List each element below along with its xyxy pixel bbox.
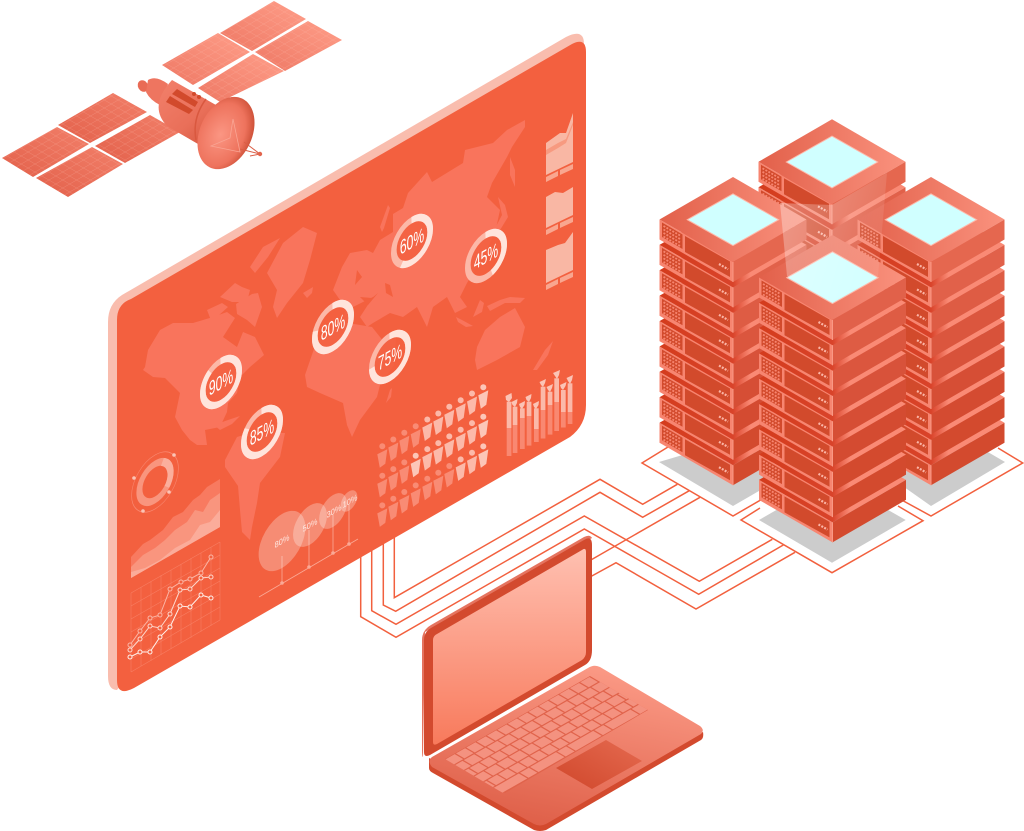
pad left stack xyxy=(642,447,790,516)
stacked area chart xyxy=(131,479,220,578)
series bright xyxy=(128,593,213,659)
mini area charts top right xyxy=(546,113,573,290)
small ring gauge xyxy=(132,442,178,522)
world map xyxy=(143,120,553,540)
novaya zemlya xyxy=(380,205,390,232)
bubble labels: 10% xyxy=(343,492,358,510)
series faded xyxy=(128,555,213,647)
satellite body xyxy=(159,80,230,144)
line chart xyxy=(128,542,220,672)
satellite nozzle xyxy=(136,78,168,105)
shadow left stack xyxy=(659,440,790,506)
floor pads and shadows xyxy=(642,430,1023,573)
dish antenna xyxy=(186,88,266,178)
greenland xyxy=(267,227,317,318)
mini chart 3 xyxy=(546,232,573,290)
ellesmere xyxy=(250,238,280,273)
cable A xyxy=(394,479,677,598)
server stack right xyxy=(858,177,1004,485)
donut 85% xyxy=(244,400,280,464)
pad center stack xyxy=(741,506,923,573)
madagascar xyxy=(386,388,392,403)
bubble chart xyxy=(259,487,358,597)
series middle xyxy=(128,575,213,652)
borneo xyxy=(473,300,484,317)
grid xyxy=(131,542,220,672)
upper solar wing xyxy=(162,1,342,102)
arctic islands middle xyxy=(207,303,228,323)
donut 90% xyxy=(203,350,239,414)
lower bar segments xyxy=(507,402,572,456)
laptop xyxy=(422,536,703,831)
upper bar segments xyxy=(507,378,572,429)
sakhalin xyxy=(510,157,515,187)
bubble labels: 80% xyxy=(275,532,290,550)
donut 80%: 80% xyxy=(321,310,345,346)
body ring xyxy=(195,99,206,140)
server stack front xyxy=(759,235,906,542)
bubble labels xyxy=(275,492,358,550)
screen face xyxy=(117,42,586,691)
new zealand xyxy=(533,341,553,370)
eurasia xyxy=(333,120,525,327)
cable F xyxy=(590,552,795,609)
cable E xyxy=(590,497,700,560)
shadow right stack xyxy=(880,430,1005,506)
donut 75% xyxy=(372,326,408,388)
japan xyxy=(493,197,508,235)
shadow center stack xyxy=(759,478,906,563)
axis dots xyxy=(280,542,351,585)
sumatra xyxy=(456,317,473,327)
laptop base xyxy=(429,666,703,831)
donut 80% xyxy=(315,296,351,358)
donut 45%: 45% xyxy=(474,239,498,275)
pad right stack xyxy=(898,448,1023,516)
bar caps xyxy=(506,370,573,409)
cable D xyxy=(361,529,783,637)
caribbean xyxy=(214,416,240,430)
cables between devices xyxy=(361,479,795,637)
keyboard xyxy=(445,676,648,793)
laptop lid back edge xyxy=(422,536,592,757)
donut 90%: 90% xyxy=(209,365,233,401)
cable B xyxy=(383,491,689,611)
inland seas xyxy=(355,270,393,305)
cable C xyxy=(372,516,772,624)
dashboard screen xyxy=(108,34,586,691)
people row 3 xyxy=(377,443,488,527)
laptop screen xyxy=(433,549,586,745)
iceland xyxy=(303,287,313,298)
light beam between servers xyxy=(780,173,887,302)
australia xyxy=(475,308,525,370)
lower solar wing xyxy=(2,93,180,197)
north america xyxy=(143,312,264,445)
donut 60% xyxy=(394,210,430,272)
people row 2 xyxy=(377,414,488,497)
satellite xyxy=(2,1,342,197)
server stack left xyxy=(660,177,806,485)
bar chart xyxy=(506,370,573,456)
donut 45% xyxy=(468,224,504,288)
donut 60%: 60% xyxy=(400,224,424,260)
touchpad xyxy=(556,740,642,789)
mini chart 1 xyxy=(546,113,573,182)
server stack back xyxy=(758,119,906,300)
donut 85%: 85% xyxy=(250,415,274,451)
bubble labels: 50% xyxy=(303,516,318,534)
africa xyxy=(305,322,396,437)
laptop lid frame xyxy=(424,538,592,756)
people row 1 xyxy=(377,384,488,468)
mini chart 2 xyxy=(546,187,573,235)
people pictogram xyxy=(377,384,488,527)
arctic islands north xyxy=(220,283,250,302)
south america xyxy=(225,432,285,540)
screen back edge xyxy=(108,34,584,690)
axis and stems xyxy=(259,505,358,597)
new guinea chain xyxy=(487,297,525,311)
donut 75%: 75% xyxy=(378,340,402,376)
body hatch marks xyxy=(166,89,201,114)
arctic islands east xyxy=(236,293,262,327)
bubble labels: 30% xyxy=(327,502,342,520)
bubbles xyxy=(259,487,357,582)
